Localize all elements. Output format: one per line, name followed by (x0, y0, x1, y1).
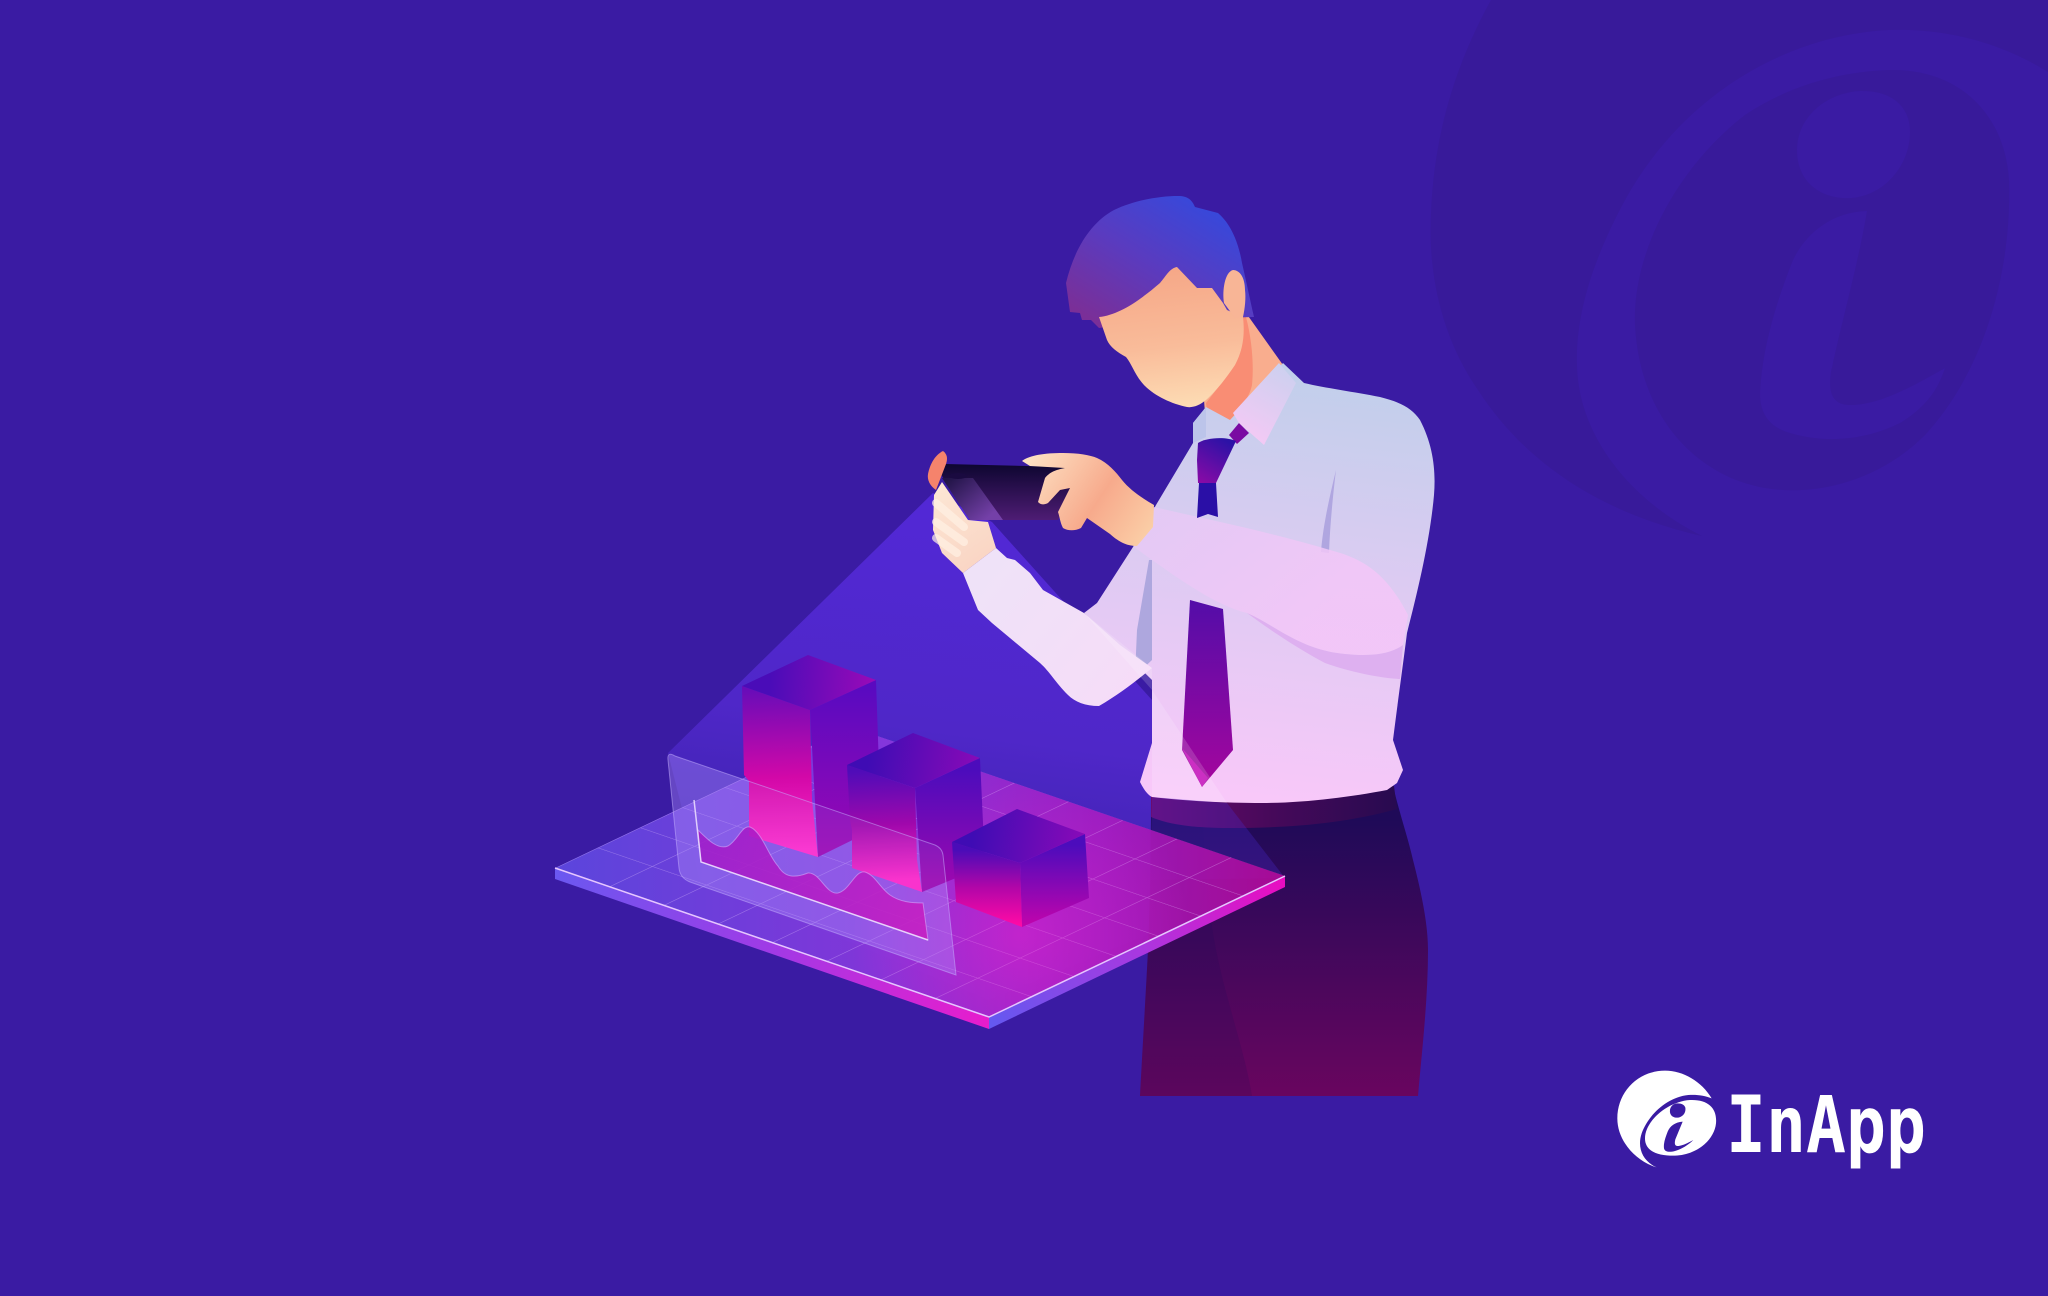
glass panel with area chart (668, 754, 956, 975)
shirt torso (1084, 363, 1435, 803)
platform grid (555, 727, 1285, 1017)
man figure (928, 196, 1435, 1096)
bar 1 (742, 655, 881, 857)
head (1066, 196, 1254, 407)
ear (1223, 270, 1245, 318)
isometric platform (555, 727, 1285, 1029)
tie (1182, 423, 1249, 787)
logo wordmark: InApp (1726, 1081, 1926, 1171)
watermark: faint InApp logo mark (1431, 0, 2048, 536)
neck (1204, 313, 1283, 440)
phone (937, 464, 1072, 520)
platform glow (876, 794, 1158, 1016)
glass pane front sheen (668, 754, 956, 975)
collar (1193, 363, 1296, 445)
left hand (928, 451, 996, 573)
shirt waist shadow (1247, 613, 1403, 679)
area chart (698, 827, 928, 940)
platform edge highlight (555, 868, 1285, 1017)
light beam overlay on shirt and trousers (1084, 613, 1285, 880)
logo mark (1617, 1071, 1716, 1167)
right hand (1022, 453, 1154, 546)
sleeve crease (1321, 470, 1336, 553)
platform top (555, 727, 1285, 1017)
InApp logo (1617, 1071, 1926, 1171)
trousers (1140, 786, 1428, 1096)
bar chart: isometric bars (742, 655, 1089, 927)
platform left side face (555, 868, 989, 1029)
shirt fold near waist (1135, 560, 1152, 676)
light beam from phone (668, 493, 1285, 1000)
illustration canvas (554, 0, 2048, 1168)
platform right side face (989, 876, 1285, 1029)
face (1099, 267, 1244, 407)
left forearm sleeve (963, 548, 1152, 706)
right forearm sleeve (1134, 507, 1408, 655)
bar 2 (847, 733, 985, 892)
bar 3 (952, 809, 1089, 927)
hair (1066, 196, 1254, 328)
chart axes (694, 800, 928, 940)
glass pane back layer (668, 754, 956, 975)
